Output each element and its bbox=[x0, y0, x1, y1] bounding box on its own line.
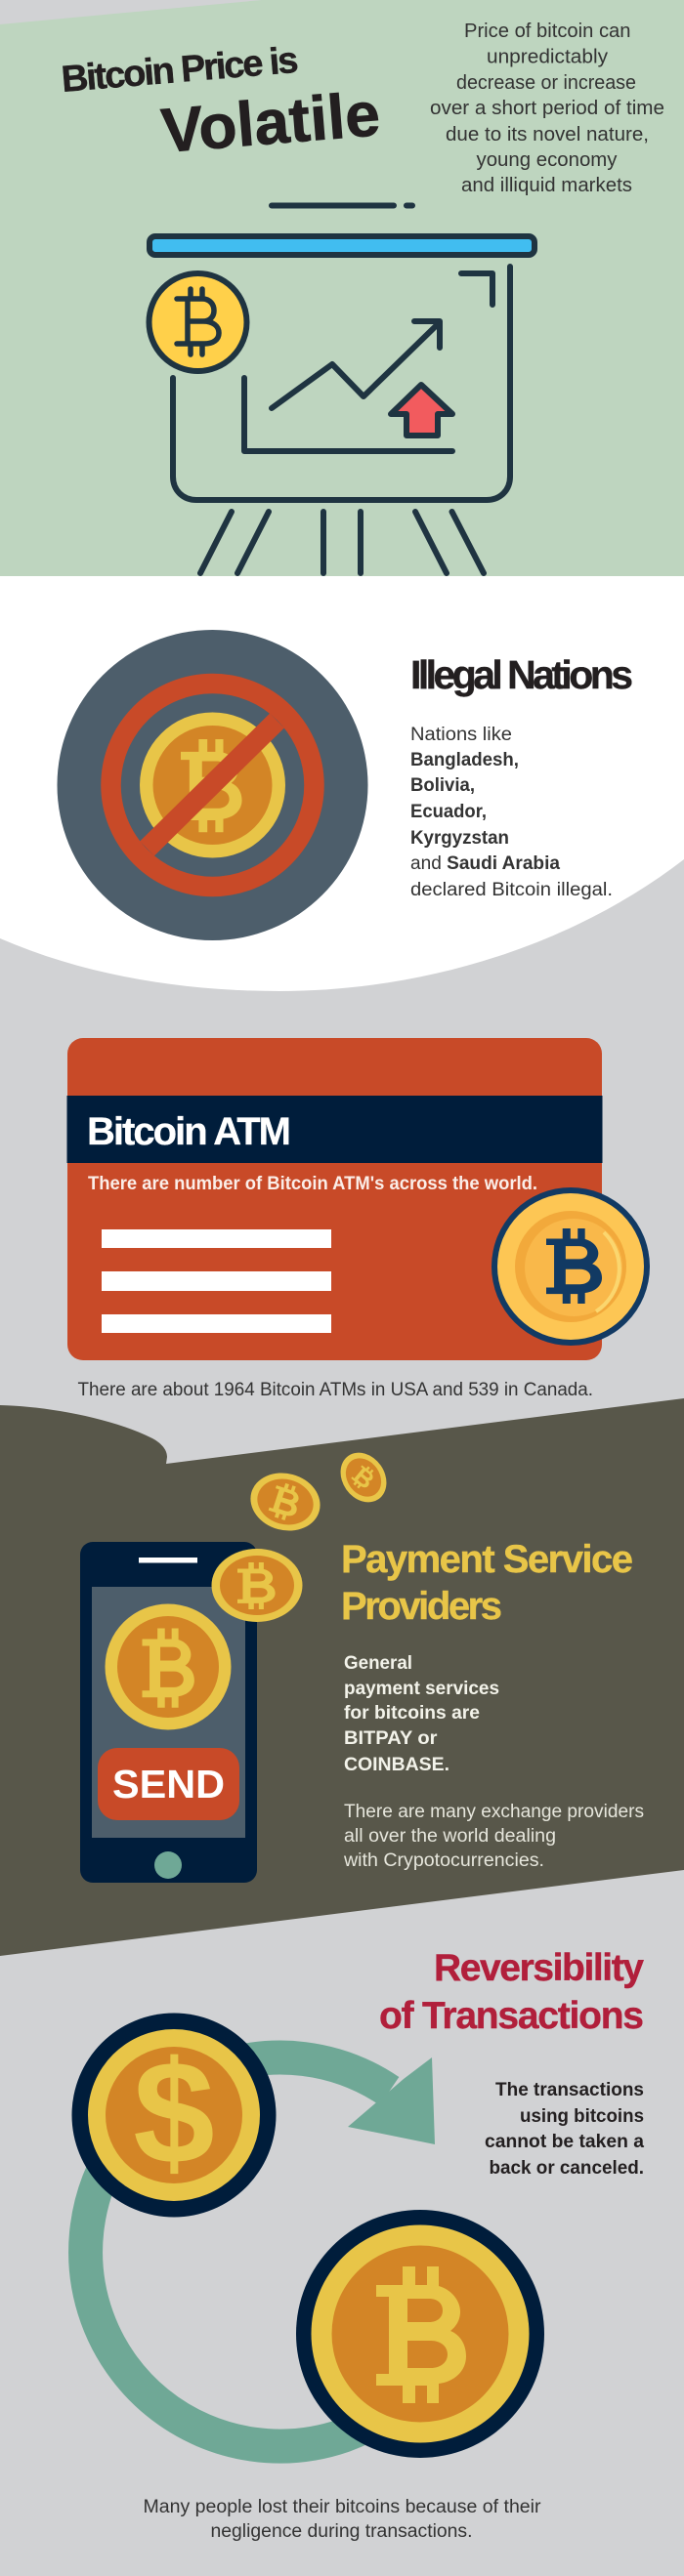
text: ATM intro: There are number of Bitcoin ATM's across the world. bbox=[88, 1174, 537, 1194]
text: general payment services: General bbox=[344, 1653, 412, 1674]
board frame bbox=[173, 267, 510, 500]
heading: Reversibility of Transactions bbox=[379, 1947, 644, 2037]
icon: red up arrow bbox=[391, 385, 452, 436]
title: Volatile: Volatile bbox=[158, 78, 382, 166]
heading: Reversibility of Transactions: of Transactions bbox=[379, 1995, 644, 2037]
heading: Payment Service Providers bbox=[341, 1538, 633, 1628]
text: volatility description: and illiquid markets bbox=[461, 175, 632, 196]
card lines bbox=[102, 1229, 331, 1333]
text: list of nations bbox=[410, 725, 613, 900]
text: volatility description: decrease or increase bbox=[456, 72, 636, 94]
bitcoin sign outline bbox=[177, 289, 219, 354]
text: closing caption: negligence during transactions. bbox=[211, 2521, 473, 2542]
text: general payment services: BITPAY or bbox=[344, 1728, 438, 1749]
chart trend arrow bbox=[272, 321, 440, 408]
text: general payment services: COINBASE. bbox=[344, 1755, 449, 1775]
text: exchange providers: with Crypotocurrencies. bbox=[343, 1850, 544, 1871]
icon: presentation board with rising chart bbox=[149, 205, 534, 573]
panel: reversibility of transactions bbox=[72, 1947, 644, 2542]
icon: gold bitcoin coin bbox=[492, 1187, 650, 1346]
text: volatility description: Price of bitcoin can bbox=[464, 21, 631, 42]
icon: bitcoin coin bbox=[296, 2210, 544, 2458]
text: closing caption: Many people lost their bitcoins because of their bbox=[143, 2497, 541, 2517]
panel: bitcoin price is volatile bbox=[0, 0, 684, 576]
icon: phone bbox=[80, 1542, 257, 1883]
arrow: circular teal arrow bbox=[86, 2057, 435, 2446]
text: volatility description bbox=[430, 21, 664, 196]
send label: SEND bbox=[112, 1762, 225, 1807]
icon: large coin on phone bbox=[106, 1603, 231, 1730]
text: general payment services: payment services bbox=[344, 1679, 499, 1699]
text: volatility description: over a short period of time bbox=[430, 98, 664, 119]
heading: Payment Service Providers: Providers bbox=[341, 1585, 502, 1628]
icon: dollar coin bbox=[72, 2014, 276, 2217]
text: volatility description: young economy bbox=[477, 149, 618, 171]
icon: prohibited bitcoin bbox=[57, 630, 367, 940]
chart axes bbox=[244, 378, 452, 451]
text: general payment services bbox=[344, 1653, 499, 1775]
text: transactions cannot be cancelled: using bitcoins bbox=[520, 2106, 644, 2127]
dollar sign: $ bbox=[133, 2030, 215, 2194]
title: Bitcoin Price is: Bitcoin Price is bbox=[60, 40, 300, 101]
icon: coin beside phone bbox=[211, 1549, 303, 1622]
text: volatility description: unpredictably bbox=[487, 47, 608, 68]
text: list of nations: Ecuador, bbox=[410, 802, 487, 822]
text: list of nations: Bolivia, bbox=[410, 775, 475, 796]
heading band bbox=[66, 1096, 602, 1163]
text: exchange providers: all over the world dealing bbox=[344, 1826, 556, 1847]
text: transactions cannot be cancelled: cannot be taken a bbox=[485, 2132, 644, 2152]
heading: Payment Service Providers: Payment Service bbox=[341, 1538, 633, 1581]
send button bbox=[98, 1748, 239, 1820]
icon: blue board rail bbox=[150, 236, 534, 255]
text: list of nations: Nations like bbox=[410, 725, 512, 745]
text: transactions cannot be cancelled: The transactions bbox=[495, 2080, 644, 2100]
heading: Reversibility of Transactions: Reversibility bbox=[434, 1947, 644, 1989]
text: exchange providers bbox=[343, 1802, 644, 1871]
easel legs bbox=[200, 512, 484, 573]
text: list of nations: declared Bitcoin illegal. bbox=[410, 880, 613, 900]
text: volatility description: due to its novel nature, bbox=[446, 124, 649, 145]
text: list of nations: and Saudi Arabia bbox=[410, 853, 560, 874]
icon: floating coin bbox=[244, 1466, 326, 1538]
icon: small floating coin bbox=[331, 1444, 396, 1511]
text: exchange providers: There are many exchange providers bbox=[344, 1802, 644, 1822]
icon: yellow bitcoin coin bbox=[149, 273, 246, 371]
text: closing caption bbox=[143, 2497, 541, 2542]
text: ATM counts: There are about 1964 Bitcoin ATMs in USA and 539 in Canada. bbox=[78, 1380, 593, 1400]
text: transactions cannot be cancelled bbox=[485, 2080, 644, 2179]
panel: bitcoin ATM card bbox=[66, 1038, 650, 1360]
text: transactions cannot be cancelled: back or canceled. bbox=[489, 2158, 644, 2179]
text: list of nations: Bangladesh, bbox=[410, 750, 519, 770]
heading: Illegal Nations: Illegal Nations bbox=[410, 652, 633, 697]
text: list of nations: Kyrgyzstan bbox=[410, 828, 509, 849]
panel: illegal nations bbox=[0, 576, 684, 991]
heading: Bitcoin ATM: Bitcoin ATM bbox=[87, 1110, 291, 1153]
text: general payment services: for bitcoins are bbox=[344, 1703, 480, 1724]
panel: payment service providers bbox=[0, 1398, 684, 1956]
